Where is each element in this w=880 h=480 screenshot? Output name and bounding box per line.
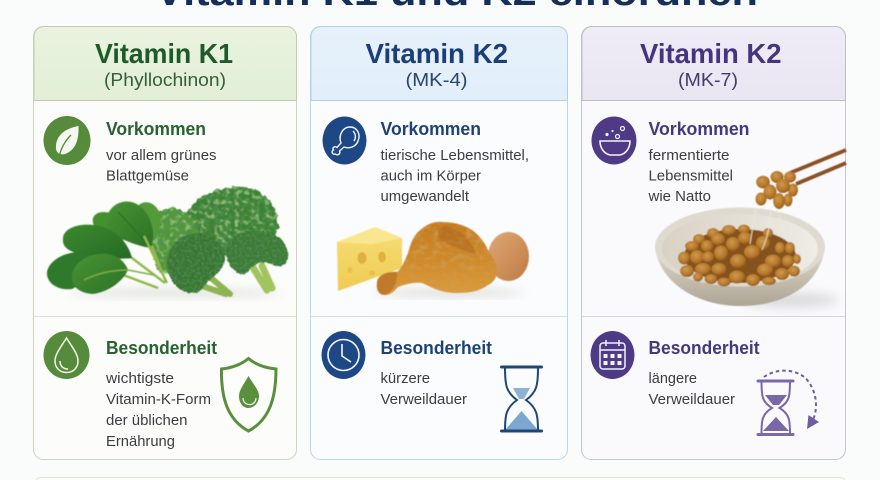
broccoli right [226, 230, 288, 290]
panel: bottom strip [36, 478, 845, 480]
icon: drumstick [322, 116, 366, 164]
icon: water drop [44, 331, 90, 379]
natto strings [750, 206, 786, 250]
heading: Besonderheit: Besonderheit [648, 338, 760, 358]
back leaves [138, 202, 161, 238]
heading: Vorkommen: Vorkommen [380, 119, 481, 139]
text: feature MK-4: kürzere [380, 371, 430, 387]
text: feature MK-7: längere [648, 371, 697, 387]
panel: Vitamin K2 MK-4 [310, 26, 568, 460]
divider [311, 316, 567, 318]
text: feature MK-7: Verweildauer [648, 392, 735, 408]
image: leafy greens [47, 187, 288, 296]
text: occurrence MK-7: fermentierte [648, 148, 730, 164]
text: occurrence MK-4: auch im Körper [380, 168, 481, 184]
broccoli left [167, 233, 230, 294]
stems [110, 236, 167, 288]
icon: leaf [44, 116, 90, 165]
leaf large [72, 254, 128, 294]
header: Vitamin K1 [34, 26, 296, 100]
icon: bowl [592, 116, 636, 164]
leaf top [106, 201, 153, 248]
leaf dark [47, 252, 90, 289]
bean cluster [756, 171, 798, 209]
beans [678, 224, 801, 286]
chicken [377, 222, 497, 295]
heading: Vorkommen: Vorkommen [648, 119, 750, 139]
icon: hourglass [502, 367, 542, 431]
text: feature K1: Vitamin-K-Form [106, 392, 211, 408]
header: Vitamin K1: (Phyllochinon) [104, 70, 226, 90]
text: occurrence K1: vor allem grünes [106, 148, 216, 164]
text: occurrence MK-4 [380, 148, 529, 205]
icon: shield with drop [221, 358, 276, 431]
text: occurrence MK-4: tierische Lebensmittel, [380, 148, 529, 164]
header: Vitamin K2 MK-7: (MK-7) [678, 70, 738, 90]
text: occurrence K1: Blattgemüse [106, 168, 189, 184]
heading: Besonderheit: Besonderheit [380, 338, 492, 358]
panel: Vitamin K1 [34, 26, 296, 460]
image: cheese, chicken, egg [337, 222, 529, 296]
text: feature MK-7 [648, 371, 735, 408]
text: feature K1: Ernährung [106, 434, 175, 450]
divider [582, 316, 845, 318]
spinach [47, 201, 167, 294]
text: feature MK-4: Verweildauer [380, 392, 467, 408]
text: occurrence MK-7: wie Natto [647, 189, 711, 205]
panel: Vitamin K2 MK-7 [582, 26, 846, 460]
header: Vitamin K1: Vitamin K1 [95, 38, 233, 69]
text: occurrence K1 [106, 148, 216, 184]
icon: hourglass with arrow [758, 371, 819, 434]
chopsticks [790, 150, 846, 184]
cheese [337, 227, 402, 291]
text: occurrence MK-7: Lebensmittel [648, 168, 733, 184]
bowl [655, 247, 825, 306]
header: Vitamin K2 MK-4: Vitamin K2 [366, 38, 508, 69]
egg [488, 232, 529, 281]
header: Vitamin K2 MK-7 [582, 26, 846, 100]
text: feature K1 [105, 371, 211, 450]
header: Vitamin K2 MK-7: Vitamin K2 [640, 38, 782, 69]
leaf middle [63, 225, 132, 259]
text: feature K1: der üblichen [106, 413, 188, 429]
heading: Besonderheit: Besonderheit [106, 338, 217, 358]
icon: clock [322, 331, 366, 379]
image: natto bowl with chopsticks [655, 150, 846, 308]
header: Vitamin K2 MK-4 [311, 26, 568, 100]
kale [150, 187, 278, 276]
divider [34, 316, 296, 318]
text: feature MK-4 [380, 371, 467, 408]
icon: calendar [590, 331, 634, 379]
text: occurrence MK-4: umgewandelt [380, 189, 469, 205]
text: feature K1: wichtigste [105, 371, 174, 387]
heading: Vorkommen: Vorkommen [106, 119, 206, 139]
text: occurrence MK-7 [647, 148, 733, 205]
header: Vitamin K2 MK-4: (MK-4) [406, 70, 468, 90]
